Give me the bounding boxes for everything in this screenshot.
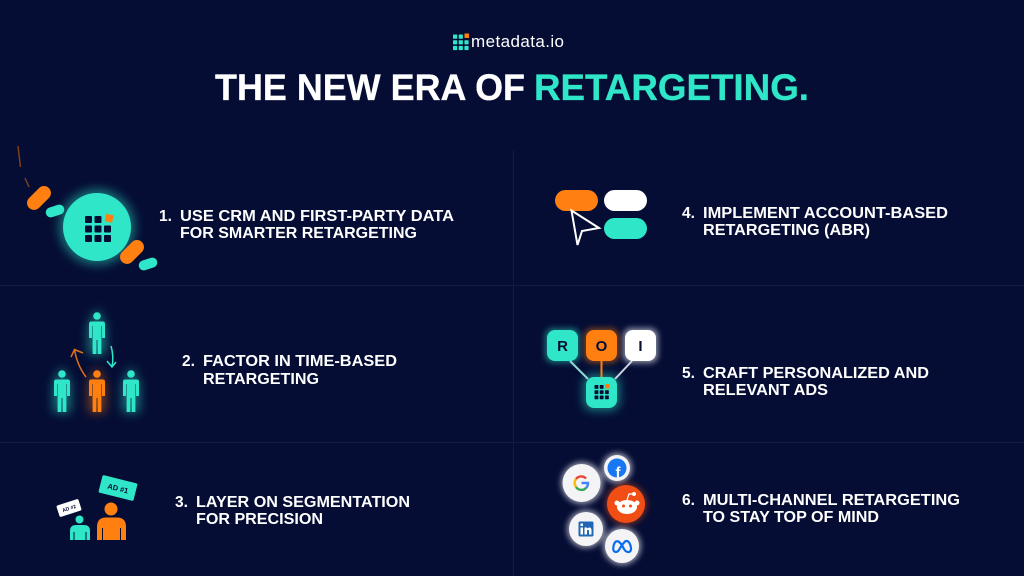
step 1 text: USE CRM AND FIRST-PARTY DATA — [180, 208, 454, 225]
icon: Facebook: f — [616, 464, 622, 482]
step 5 text: 5. — [682, 365, 695, 382]
step 1 text: 1. — [159, 208, 172, 225]
icon: people with arrows — [53, 311, 140, 413]
panel: step 5 — [545, 328, 929, 410]
step 5 text: RELEVANT ADS — [703, 382, 828, 399]
title: RETARGETING. — [534, 66, 809, 108]
step 6 text: MULTI-CHANNEL RETARGETING — [703, 492, 960, 509]
step 4 text: IMPLEMENT ACCOUNT-BASED — [703, 205, 948, 222]
step 6 text: 6. — [682, 492, 695, 509]
step 4 text: 4. — [682, 205, 695, 222]
step 5 text: CRAFT PERSONALIZED AND — [703, 365, 929, 382]
logo — [453, 32, 564, 51]
panel: step 4 — [555, 190, 948, 245]
icon: segmented audience with ads: AD #1 — [106, 482, 129, 495]
icon: Meta — [605, 529, 639, 563]
step 1 text: FOR SMARTER RETARGETING — [180, 225, 417, 242]
icon: ROI blocks — [545, 328, 658, 410]
title: THE NEW ERA OF — [215, 66, 525, 108]
icon: CRM data circle — [18, 146, 159, 272]
icon: segmented audience with ads: AD #2 — [62, 504, 77, 514]
icon: ROI blocks: R — [557, 338, 568, 355]
step 4 text — [682, 205, 948, 239]
panel: step 1 — [18, 146, 454, 272]
step 2 text: RETARGETING — [203, 371, 319, 388]
step 2 text: 2. — [182, 353, 195, 370]
step 2 text — [182, 353, 397, 388]
step 2 text: FACTOR IN TIME-BASED — [203, 353, 397, 370]
icon: segmented audience with ads — [56, 475, 138, 540]
icon: LinkedIn — [569, 512, 603, 546]
icon: ROI blocks: O — [596, 338, 608, 355]
panel: step 2 — [53, 311, 397, 413]
icon: social channel badges — [561, 453, 647, 565]
step 6 text: TO STAY TOP OF MIND — [703, 509, 879, 526]
step 1 text — [159, 208, 454, 242]
step 3 text — [175, 494, 410, 528]
logo wordmark: metadata.io — [471, 32, 564, 51]
title — [215, 66, 809, 108]
icon: Reddit — [607, 485, 645, 523]
step 3 text: LAYER ON SEGMENTATION — [196, 494, 410, 511]
step 5 text — [682, 365, 929, 399]
step 3 text: FOR PRECISION — [196, 511, 323, 528]
panel: step 3 — [56, 475, 410, 540]
step 3 text: 3. — [175, 494, 188, 511]
icon: logo grid — [453, 34, 469, 50]
panel: step 6 — [561, 453, 960, 565]
step 6 text — [682, 492, 960, 526]
icon: ROI blocks: I — [638, 338, 643, 355]
icon: pills and cursor — [555, 190, 647, 245]
icon: Google — [562, 464, 600, 502]
step 4 text: RETARGETING (ABR) — [703, 222, 870, 239]
